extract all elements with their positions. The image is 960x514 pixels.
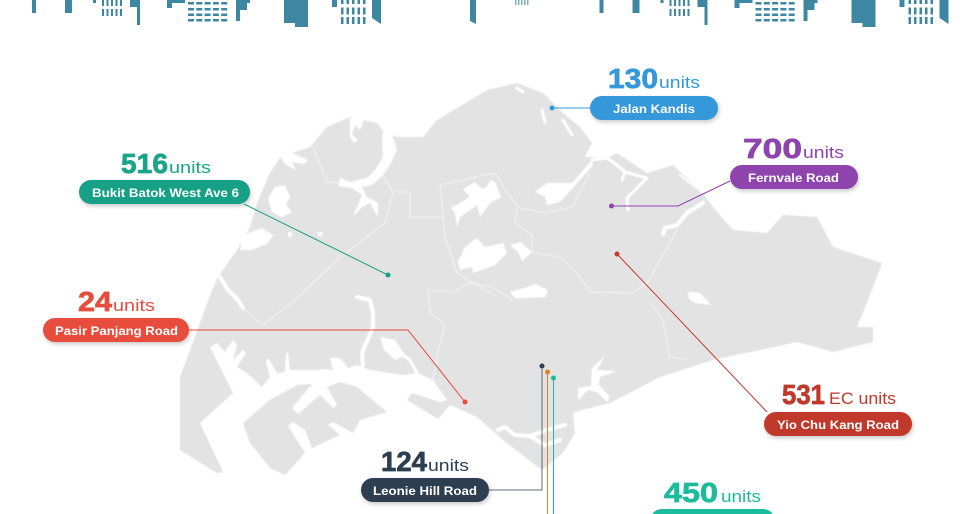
callout: Pasir Panjang Road, 24 units: Pasir Panjang Road [55,324,178,338]
callout: Bukit Batok West Ave 6, 516 units: units [169,158,211,177]
callout: Fernvale Road, 700 units [609,133,858,208]
map of Singapore [180,83,882,475]
callout: Leonie Hill Road, 124 units [361,364,544,502]
callout: Leonie Hill Road, 124 units: Leonie Hill Road [373,484,477,498]
callout: Yio Chu Kang Road, 531 EC units: 531 [782,379,825,410]
leader line: green site [551,376,556,514]
callout: Pasir Panjang Road, 24 units [43,286,468,404]
callout: Jalan Kandis, 130 units: 130 [608,63,658,94]
callout: Fernvale Road, 700 units: 700 [743,133,802,164]
callout: 450 units: 450 [664,477,718,508]
callout: Pasir Panjang Road, 24 units: 24 [78,286,112,317]
callout: 450 units: units [721,487,761,506]
callout: Leonie Hill Road, 124 units: 124 [381,446,427,477]
callout: Pasir Panjang Road, 24 units: units [113,296,155,315]
callout: Jalan Kandis, 130 units: units [659,73,700,92]
callout: Bukit Batok West Ave 6, 516 units [79,148,390,278]
callout: Fernvale Road, 700 units: units [803,143,844,162]
callout: Leonie Hill Road, 124 units: units [428,456,469,475]
callout: Jalan Kandis, 130 units [550,63,718,120]
callout: Bukit Batok West Ave 6, 516 units: 516 [121,148,168,179]
callout: Jalan Kandis, 130 units: Jalan Kandis [613,102,695,116]
callout: 450 units [650,477,775,514]
skyline banner [32,0,948,27]
callout: Yio Chu Kang Road, 531 EC units: Yio Chu Kang Road [777,418,899,432]
callout: Yio Chu Kang Road, 531 EC units [614,252,912,436]
callout: Bukit Batok West Ave 6, 516 units: Bukit Batok West Ave 6 [92,186,239,200]
callout: Fernvale Road, 700 units: Fernvale Road [748,171,839,185]
callout: Yio Chu Kang Road, 531 EC units: EC units [829,389,896,408]
leader line: orange site [545,370,550,514]
